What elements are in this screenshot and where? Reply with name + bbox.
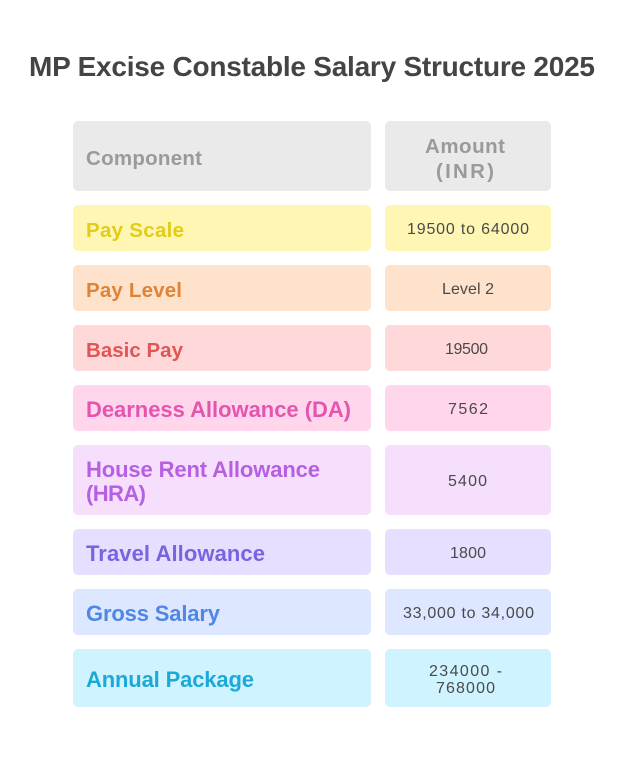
- row value: Travel Allowance: 1800: [450, 545, 486, 562]
- title: MP Excise Constable Salary Structure 2025: [29, 51, 595, 82]
- row label: Annual Package: [73, 649, 371, 707]
- row label: Travel Allowance: Travel Allowance: [86, 541, 265, 566]
- row label: Pay Scale: Pay Scale: [86, 219, 184, 242]
- row value: House Rent Allowance: [385, 445, 551, 515]
- row label: Gross Salary: [73, 589, 371, 635]
- row label: Pay Scale: [73, 205, 371, 251]
- row value: Annual Package: [385, 649, 551, 707]
- row value: House Rent Allowance: 5400: [448, 473, 487, 490]
- row label: Annual Package: Annual Package: [86, 667, 254, 692]
- row label: Gross Salary: Gross Salary: [86, 601, 221, 626]
- row label: Pay Level: [73, 265, 371, 311]
- row label: Pay Level: Pay Level: [86, 279, 182, 302]
- row value: Basic Pay: 19500: [445, 341, 488, 358]
- row value: Gross Salary: 33,000 to 34,000: [403, 605, 534, 622]
- row value: Dearness Allowance: [385, 385, 551, 431]
- row label: House Rent Allowance: [73, 445, 371, 515]
- header cell: Amount (INR): [385, 121, 551, 191]
- row value: Annual Package: 768000: [436, 680, 495, 697]
- row value: Travel Allowance: [385, 529, 551, 575]
- row value: Pay Scale: 19500 to 64000: [407, 221, 529, 238]
- row label: Dearness Allowance: Dearness Allowance (DA): [86, 397, 351, 422]
- row label: Dearness Allowance: [73, 385, 371, 431]
- header cell: Amount (INR): Amount: [425, 135, 505, 158]
- row label: Basic Pay: Basic Pay: [86, 339, 184, 362]
- row value: Pay Level: [385, 265, 551, 311]
- row value: Basic Pay: [385, 325, 551, 371]
- header cell: Amount (INR): (INR): [436, 160, 494, 183]
- header cell: Component: [73, 121, 371, 191]
- row label: Basic Pay: [73, 325, 371, 371]
- row label: House Rent Allowance: House Rent Allowance: [86, 457, 320, 482]
- salary table: [73, 121, 551, 707]
- row value: Pay Scale: [385, 205, 551, 251]
- row value: Pay Level: Level 2: [442, 281, 494, 298]
- row label: Travel Allowance: [73, 529, 371, 575]
- row value: Gross Salary: [385, 589, 551, 635]
- row value: Dearness Allowance: 7562: [448, 401, 488, 418]
- row label: House Rent Allowance: (HRA): [86, 481, 146, 506]
- row value: Annual Package: 234000 -: [429, 663, 502, 680]
- header cell: Component: Component: [86, 147, 202, 170]
